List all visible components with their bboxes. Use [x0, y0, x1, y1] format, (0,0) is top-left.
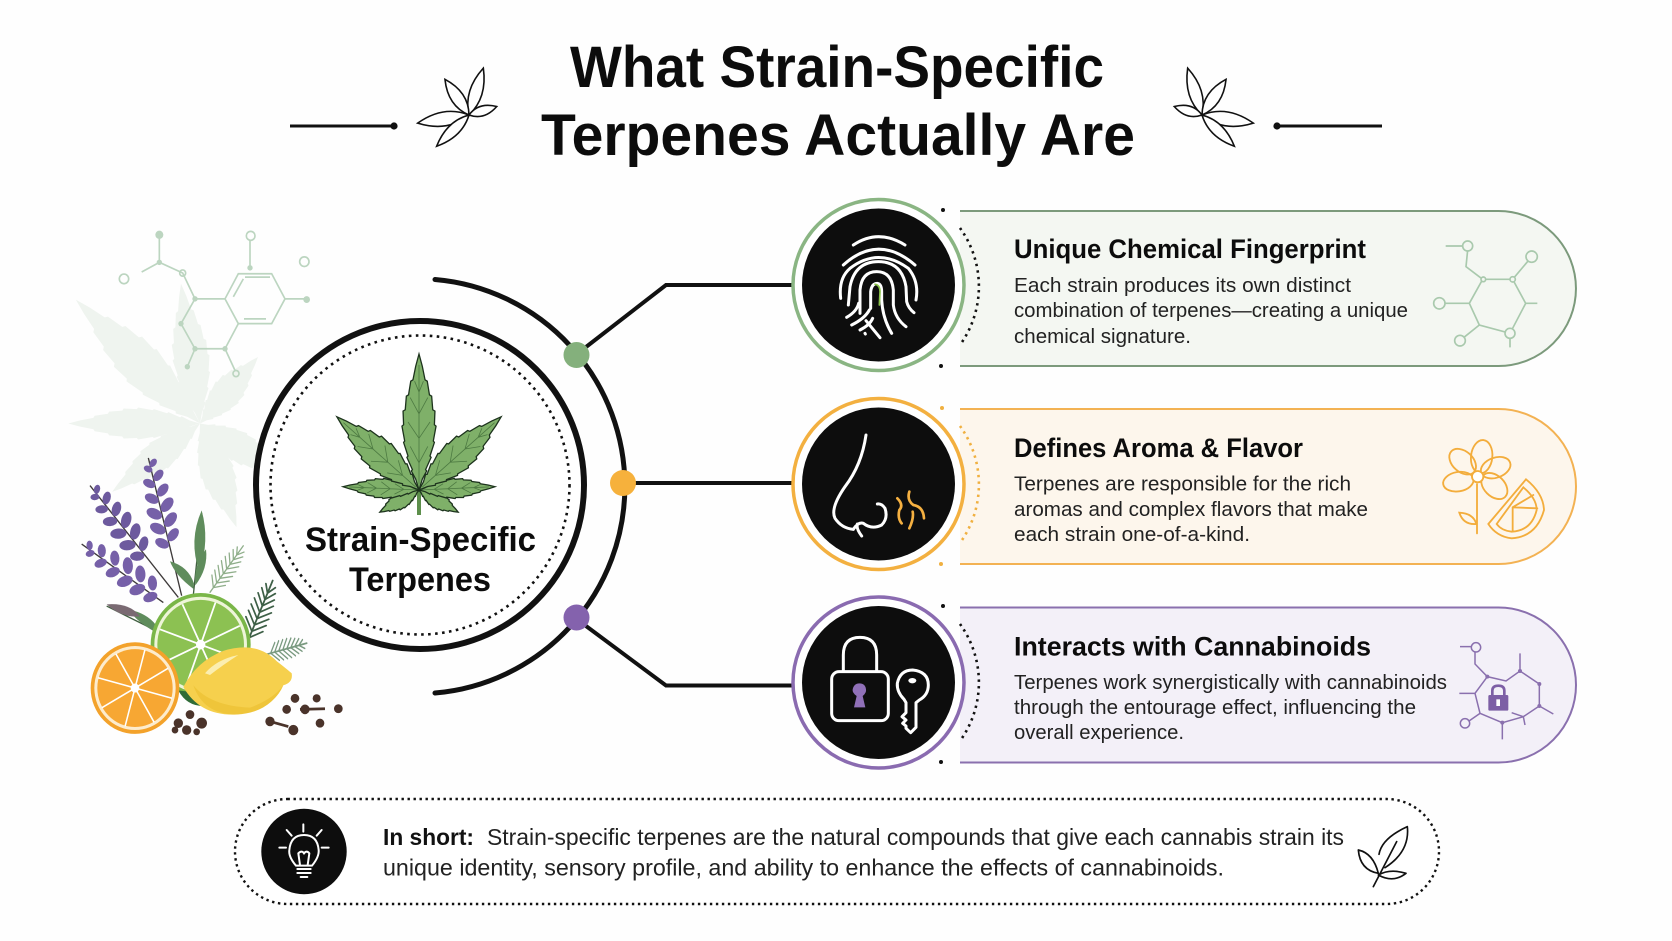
icon: lock and key	[793, 597, 964, 768]
connector: orange	[610, 470, 792, 496]
panel text	[1014, 274, 1408, 348]
icon: fingerprint	[793, 200, 964, 370]
outer arc	[435, 280, 625, 693]
lavender sprigs	[75, 454, 186, 611]
panel text: each strain one-of-a-kind.	[1014, 523, 1250, 546]
hub label: Strain-Specific	[305, 521, 536, 559]
hub label	[305, 521, 536, 599]
panel text: Terpenes are responsible for the rich	[1014, 472, 1351, 496]
icon: nose	[793, 398, 964, 570]
panel: interacts with cannabinoids	[793, 597, 1576, 768]
panel text	[1014, 671, 1447, 744]
pine sprigs	[203, 540, 309, 664]
panel heading: Interacts with Cannabinoids	[1014, 632, 1371, 662]
cannabis leaf	[326, 354, 512, 520]
panel text: Each strain produces its own distinct	[1014, 274, 1351, 297]
callout border	[235, 799, 1439, 904]
central hub circle	[256, 321, 584, 649]
panel background	[960, 409, 1576, 564]
panel text: overall experience.	[1014, 721, 1184, 744]
dotted arc	[939, 208, 979, 368]
title: Terpenes Actually Are	[541, 103, 1135, 168]
callout text	[383, 824, 1344, 880]
lime slice	[145, 587, 256, 702]
title: What Strain-Specific	[570, 35, 1104, 100]
panel text: combination of terpenes—creating a unique	[1014, 299, 1408, 322]
panel background	[960, 608, 1576, 762]
callout: in short	[235, 799, 1439, 904]
connector: green	[564, 285, 792, 368]
icon: flower and citrus	[1442, 439, 1544, 538]
orange slice	[88, 640, 182, 737]
panel text: Terpenes work synergistically with cannabinoids	[1014, 671, 1447, 694]
dark leaf under lemon	[178, 690, 203, 706]
icon: molecule with lock	[1459, 643, 1553, 739]
panel: unique chemical fingerprint	[793, 200, 1576, 370]
cloves	[172, 694, 343, 735]
rosemary sprigs	[107, 510, 206, 632]
panel: defines aroma and flavor	[793, 398, 1576, 570]
panel background	[960, 211, 1576, 366]
molecule diagram	[119, 231, 310, 377]
panel text: aromas and complex flavors that make	[1014, 498, 1368, 521]
lemon	[183, 647, 292, 715]
dotted arc	[939, 406, 979, 566]
panel text: chemical signature.	[1014, 325, 1191, 348]
callout text: unique identity, sensory profile, and ability to enhance the effects of cannabinoids.	[383, 854, 1224, 880]
panel heading: Unique Chemical Fingerprint	[1014, 234, 1366, 264]
title ornament: left line and leaf	[290, 66, 498, 150]
icon: leaf	[1358, 827, 1408, 887]
callout text: Strain-specific terpenes are the natural compounds that give each cannabis strain its	[487, 824, 1344, 850]
panel text	[1014, 472, 1368, 546]
hub label: Terpenes	[349, 561, 491, 599]
dotted arc	[939, 604, 979, 764]
panel text: through the entourage effect, influencing the	[1014, 696, 1416, 719]
connector: purple	[564, 604, 792, 686]
icon: light bulb	[261, 809, 347, 894]
title ornament: right line and leaf	[1173, 66, 1382, 150]
icon: molecule	[1434, 241, 1537, 347]
watermark cannabis leaf	[61, 281, 291, 533]
title	[541, 35, 1135, 168]
panel heading: Defines Aroma & Flavor	[1014, 433, 1303, 463]
botanical illustration	[61, 231, 343, 737]
callout text: In short:	[383, 824, 474, 850]
